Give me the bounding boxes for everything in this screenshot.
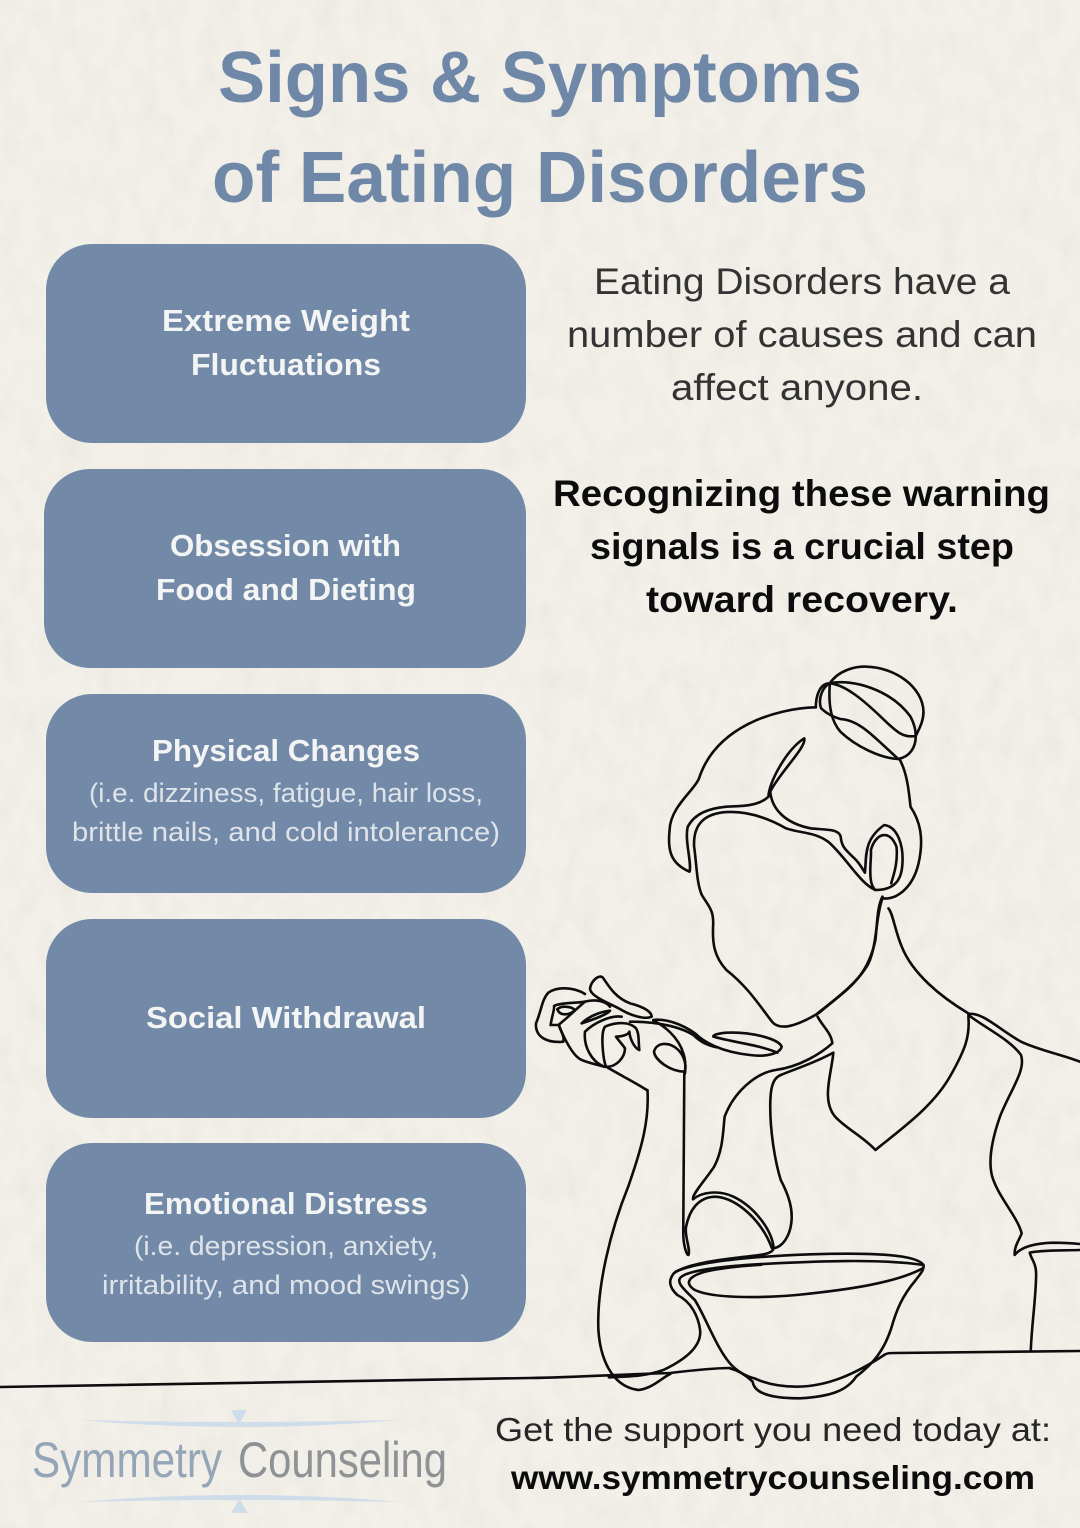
woman's body and arm [598,1014,1080,1390]
logo wordmark: Symmetry [32,1432,222,1488]
panel: obsession with food and dieting [44,469,526,668]
panel: emotional distress: irritability, and mood swings) [102,1270,470,1300]
panel: extreme weight fluctuations: Fluctuations [191,347,381,382]
panel: obsession with food and dieting: Obsession with [170,528,401,563]
title: Signs & Symptoms [218,38,862,118]
panel: physical changes: Physical Changes [152,733,420,768]
emphasis text: toward recovery. [646,579,958,620]
bowl on the table [609,1248,924,1398]
panel: emotional distress: Emotional Distress [144,1186,428,1221]
panel: extreme weight fluctuations: Extreme Weight [162,303,410,338]
emphasis text: Recognizing these warning [553,473,1050,514]
logo top swoosh and arrow [80,1410,400,1427]
panel: social withdrawal: Social Withdrawal [146,1000,426,1035]
title: of Eating Disorders [212,138,868,218]
panel: emotional distress [46,1143,526,1342]
panel: emotional distress: (i.e. depression, anxiety, [134,1231,438,1261]
intro text: affect anyone. [671,367,923,408]
logo bottom swoosh and arrow [80,1495,400,1513]
table line [0,1351,1080,1387]
jar at right edge [1030,1250,1080,1351]
woman's head and hair [669,667,968,1027]
intro text [567,261,1037,408]
logo: Symmetry Counseling [32,1410,447,1513]
title [212,38,868,218]
emphasis text: signals is a crucial step [590,526,1014,567]
intro text: Eating Disorders have a [594,261,1010,302]
hand holding spoon [536,977,782,1090]
logo: Symmetry Counseling: Counseling [238,1432,447,1488]
illustration: line drawing of woman eating from a bowl [0,667,1080,1398]
panel: extreme weight fluctuations [46,244,526,443]
call to action: www.symmetrycounseling.com [510,1459,1035,1496]
panel: social withdrawal [46,919,526,1118]
panel: physical changes: brittle nails, and cold intolerance) [72,817,500,847]
call to action: Get the support you need today at: [495,1411,1051,1448]
call to action [495,1411,1051,1496]
intro text: number of causes and can [567,314,1037,355]
panel: physical changes [46,694,526,893]
panel: obsession with food and dieting: Food and Dieting [156,572,416,607]
panel: physical changes: (i.e. dizziness, fatigue, hair loss, [89,778,483,808]
emphasis text [553,473,1050,620]
